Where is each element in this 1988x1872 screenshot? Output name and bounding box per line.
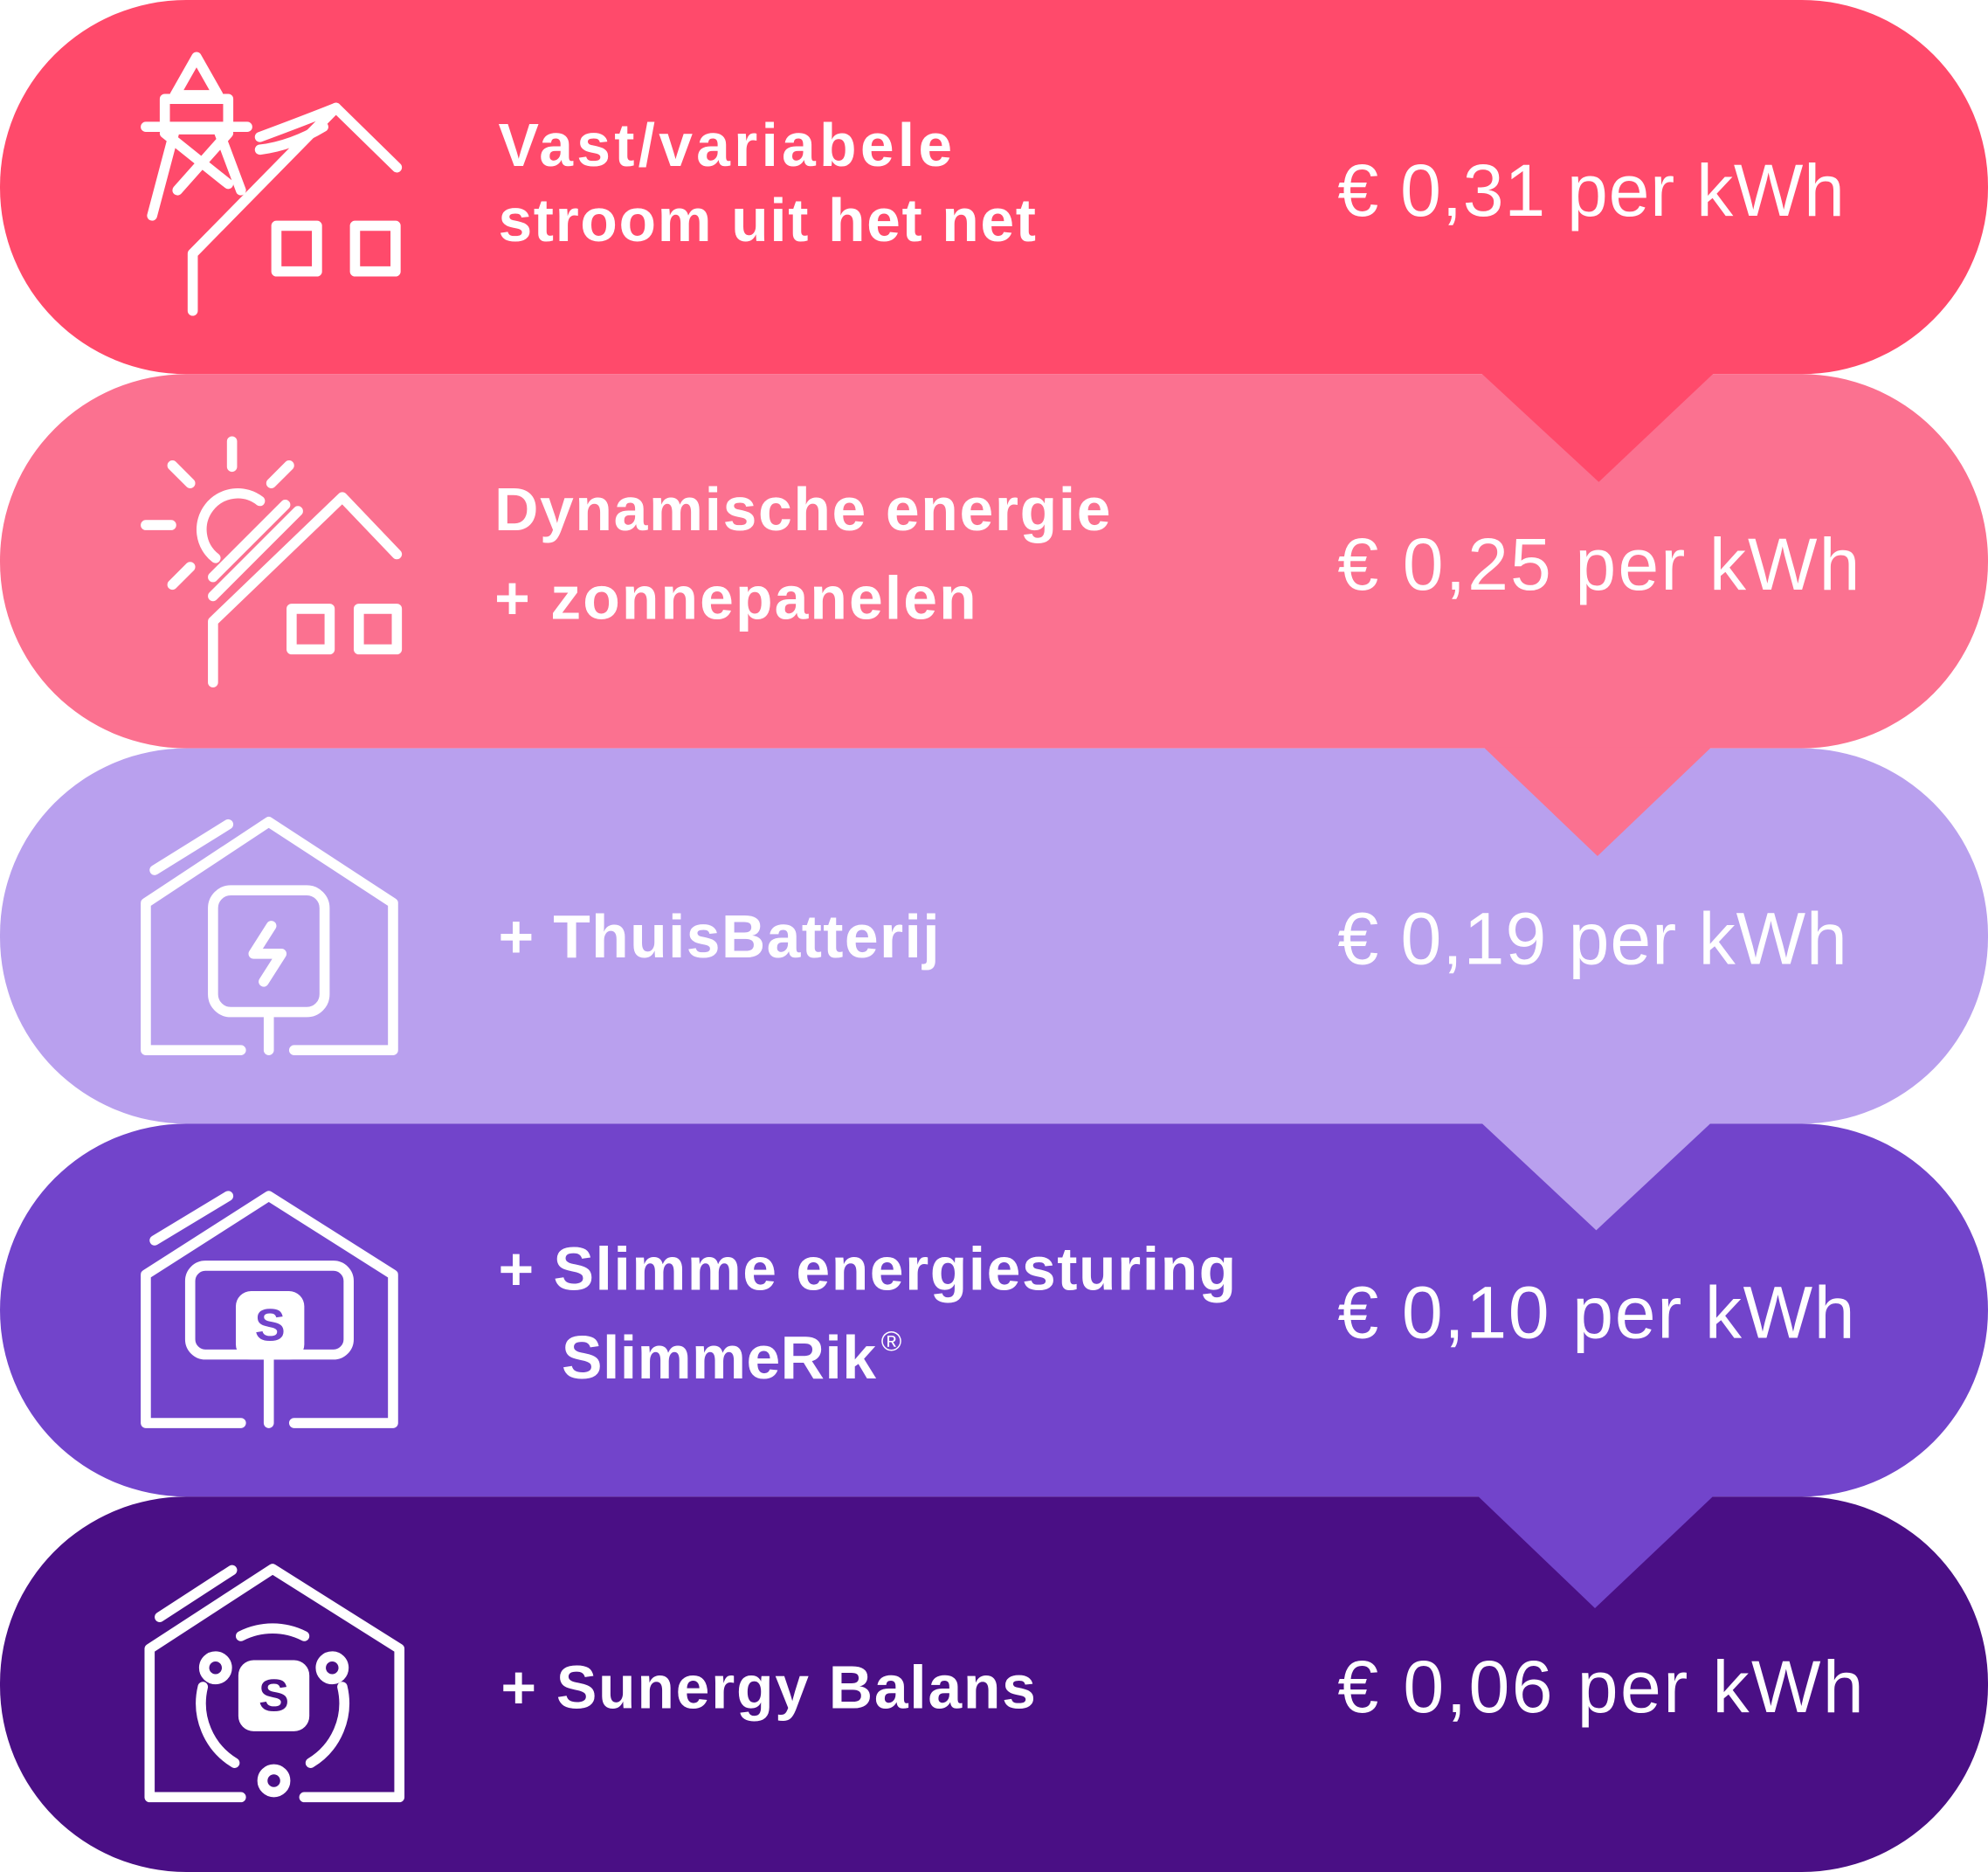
icon: house with smart chip: [146, 1196, 393, 1423]
title 5: + Sunergy Balans: [500, 1654, 1036, 1722]
icon: chip S: [238, 1661, 309, 1731]
band 1: grid electricity: [0, 0, 1988, 374]
icon: pylon and house: [146, 57, 397, 311]
icon: chip S: [236, 1291, 304, 1359]
band 2: dynamic + solar: [0, 374, 1988, 749]
icon: house with battery: [146, 822, 393, 1050]
icon: chip S: S: [255, 1301, 286, 1351]
arrow pointers between bands: [1477, 373, 1714, 1608]
price 5: € 0,06 per kWh: [1337, 1646, 1864, 1728]
icon: house with balance chip: [149, 1569, 399, 1797]
band 3: home battery: [0, 749, 1988, 1123]
price 3: € 0,19 per kWh: [1337, 897, 1847, 979]
title 4: + Slimme energiesturing: [498, 1235, 1236, 1303]
band 2: dynamic + solar: + zonnepanelen: [494, 564, 977, 632]
price 2: € 0,25 per kWh: [1337, 523, 1860, 605]
title 2: Dynamische energie: [494, 475, 1111, 543]
band 4: smart control: SlimmeRik: [562, 1323, 876, 1392]
band 4: smart control: [0, 1123, 1988, 1496]
price 4: € 0,10 per kWh: [1337, 1272, 1855, 1354]
band 4: smart control: ®: [881, 1325, 902, 1357]
icon: sun and house: [146, 441, 397, 682]
price 1: € 0,31 per kWh: [1337, 149, 1845, 231]
band 5: Sunergy Balans: [0, 1496, 1988, 1872]
title 3: + ThuisBatterij: [498, 902, 940, 971]
band 1: grid electricity: stroom uit het net: [498, 186, 1036, 254]
icon: chip S: S: [259, 1671, 289, 1722]
title 1: Vast/variabele: [498, 111, 952, 179]
